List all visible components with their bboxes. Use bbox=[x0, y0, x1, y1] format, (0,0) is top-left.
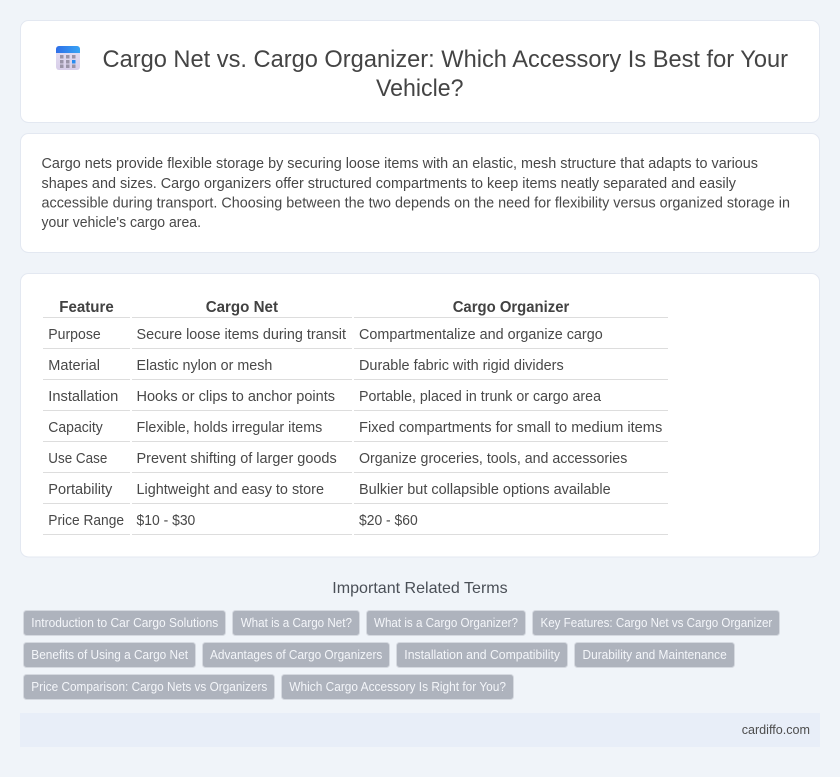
row: capacity bbox=[48, 420, 662, 436]
row: material bbox=[48, 358, 564, 374]
row: portability bbox=[48, 482, 611, 498]
title: Vehicle? bbox=[376, 75, 464, 102]
row: portability: Bulkier but collapsible options available bbox=[359, 482, 611, 498]
row: installation: Portable, placed in trunk or cargo area bbox=[359, 389, 602, 405]
tag bbox=[232, 610, 360, 636]
description text: your vehicle's cargo area. bbox=[42, 215, 201, 231]
icon: calendar bbox=[56, 46, 80, 70]
table rules bbox=[43, 318, 668, 534]
description text bbox=[42, 156, 790, 231]
tags: related terms bbox=[24, 610, 780, 700]
tag: What is a Cargo Net? bbox=[241, 616, 352, 630]
tag: Which Cargo Accessory Is Right for You? bbox=[289, 680, 506, 694]
row: purpose: Secure loose items during transit bbox=[136, 327, 346, 343]
tag bbox=[202, 642, 390, 668]
row: material: Elastic nylon or mesh bbox=[136, 358, 272, 374]
row: price range bbox=[48, 513, 418, 529]
panel: title card bbox=[20, 20, 820, 122]
tag bbox=[24, 642, 196, 668]
row: material: Material bbox=[48, 358, 100, 374]
row: installation bbox=[48, 389, 602, 405]
row: use case bbox=[48, 451, 627, 467]
panel: description card bbox=[20, 134, 820, 252]
table header: Cargo Net bbox=[206, 299, 279, 316]
row: installation: Installation bbox=[48, 389, 118, 405]
panel: comparison table card bbox=[20, 274, 820, 557]
description text: accessible during transport. Choosing between the two depends on the need for flexibility versus organized storage in bbox=[42, 196, 790, 212]
row: capacity: Flexible, holds irregular items bbox=[136, 420, 322, 436]
tag bbox=[574, 642, 734, 668]
row: purpose: Compartmentalize and organize cargo bbox=[359, 327, 603, 343]
row: price range: $20 - $60 bbox=[359, 513, 418, 529]
row: capacity: Fixed compartments for small to medium items bbox=[359, 420, 662, 436]
tag bbox=[24, 610, 226, 636]
row: use case: Organize groceries, tools, and accessories bbox=[359, 451, 627, 467]
footer domain: cardiffo.com bbox=[742, 722, 810, 737]
table header: Cargo Organizer bbox=[453, 299, 569, 316]
table header bbox=[59, 299, 569, 316]
tag: Advantages of Cargo Organizers bbox=[210, 648, 382, 662]
tag: Price Comparison: Cargo Nets vs Organizers bbox=[31, 680, 267, 694]
row: purpose: Purpose bbox=[48, 327, 101, 343]
tag bbox=[282, 674, 514, 700]
table header: Feature bbox=[59, 299, 114, 316]
tag bbox=[24, 674, 274, 700]
description text: Cargo nets provide flexible storage by securing loose items with an elastic, mesh structure that adapts to various bbox=[42, 156, 758, 172]
row: use case: Use Case bbox=[48, 451, 107, 467]
description text: shapes and sizes. Cargo organizers offer structured compartments to keep items neatly separated and easily bbox=[42, 176, 737, 192]
tag: Benefits of Using a Cargo Net bbox=[31, 648, 188, 662]
tag bbox=[366, 610, 526, 636]
row: installation: Hooks or clips to anchor points bbox=[136, 389, 335, 405]
heading: important related terms: Important Related Terms bbox=[332, 580, 508, 597]
tag: Installation and Compatibility bbox=[404, 648, 561, 662]
tag bbox=[396, 642, 568, 668]
footer bbox=[20, 713, 820, 747]
row: use case: Prevent shifting of larger goods bbox=[136, 451, 337, 467]
row: capacity: Capacity bbox=[48, 420, 103, 436]
row: purpose bbox=[48, 327, 603, 343]
row: material: Durable fabric with rigid dividers bbox=[359, 358, 564, 374]
tag bbox=[532, 610, 780, 636]
row: price range: Price Range bbox=[48, 513, 124, 529]
row: portability: Lightweight and easy to store bbox=[136, 482, 324, 498]
tag: Durability and Maintenance bbox=[582, 648, 727, 662]
tag: Introduction to Car Cargo Solutions bbox=[31, 616, 218, 630]
title bbox=[102, 46, 788, 102]
tag: Key Features: Cargo Net vs Cargo Organizer bbox=[540, 616, 772, 630]
row: portability: Portability bbox=[48, 482, 113, 498]
tag: What is a Cargo Organizer? bbox=[374, 616, 518, 630]
row: price range: $10 - $30 bbox=[136, 513, 195, 529]
title: Cargo Net vs. Cargo Organizer: Which Accessory Is Best for Your bbox=[102, 46, 788, 73]
